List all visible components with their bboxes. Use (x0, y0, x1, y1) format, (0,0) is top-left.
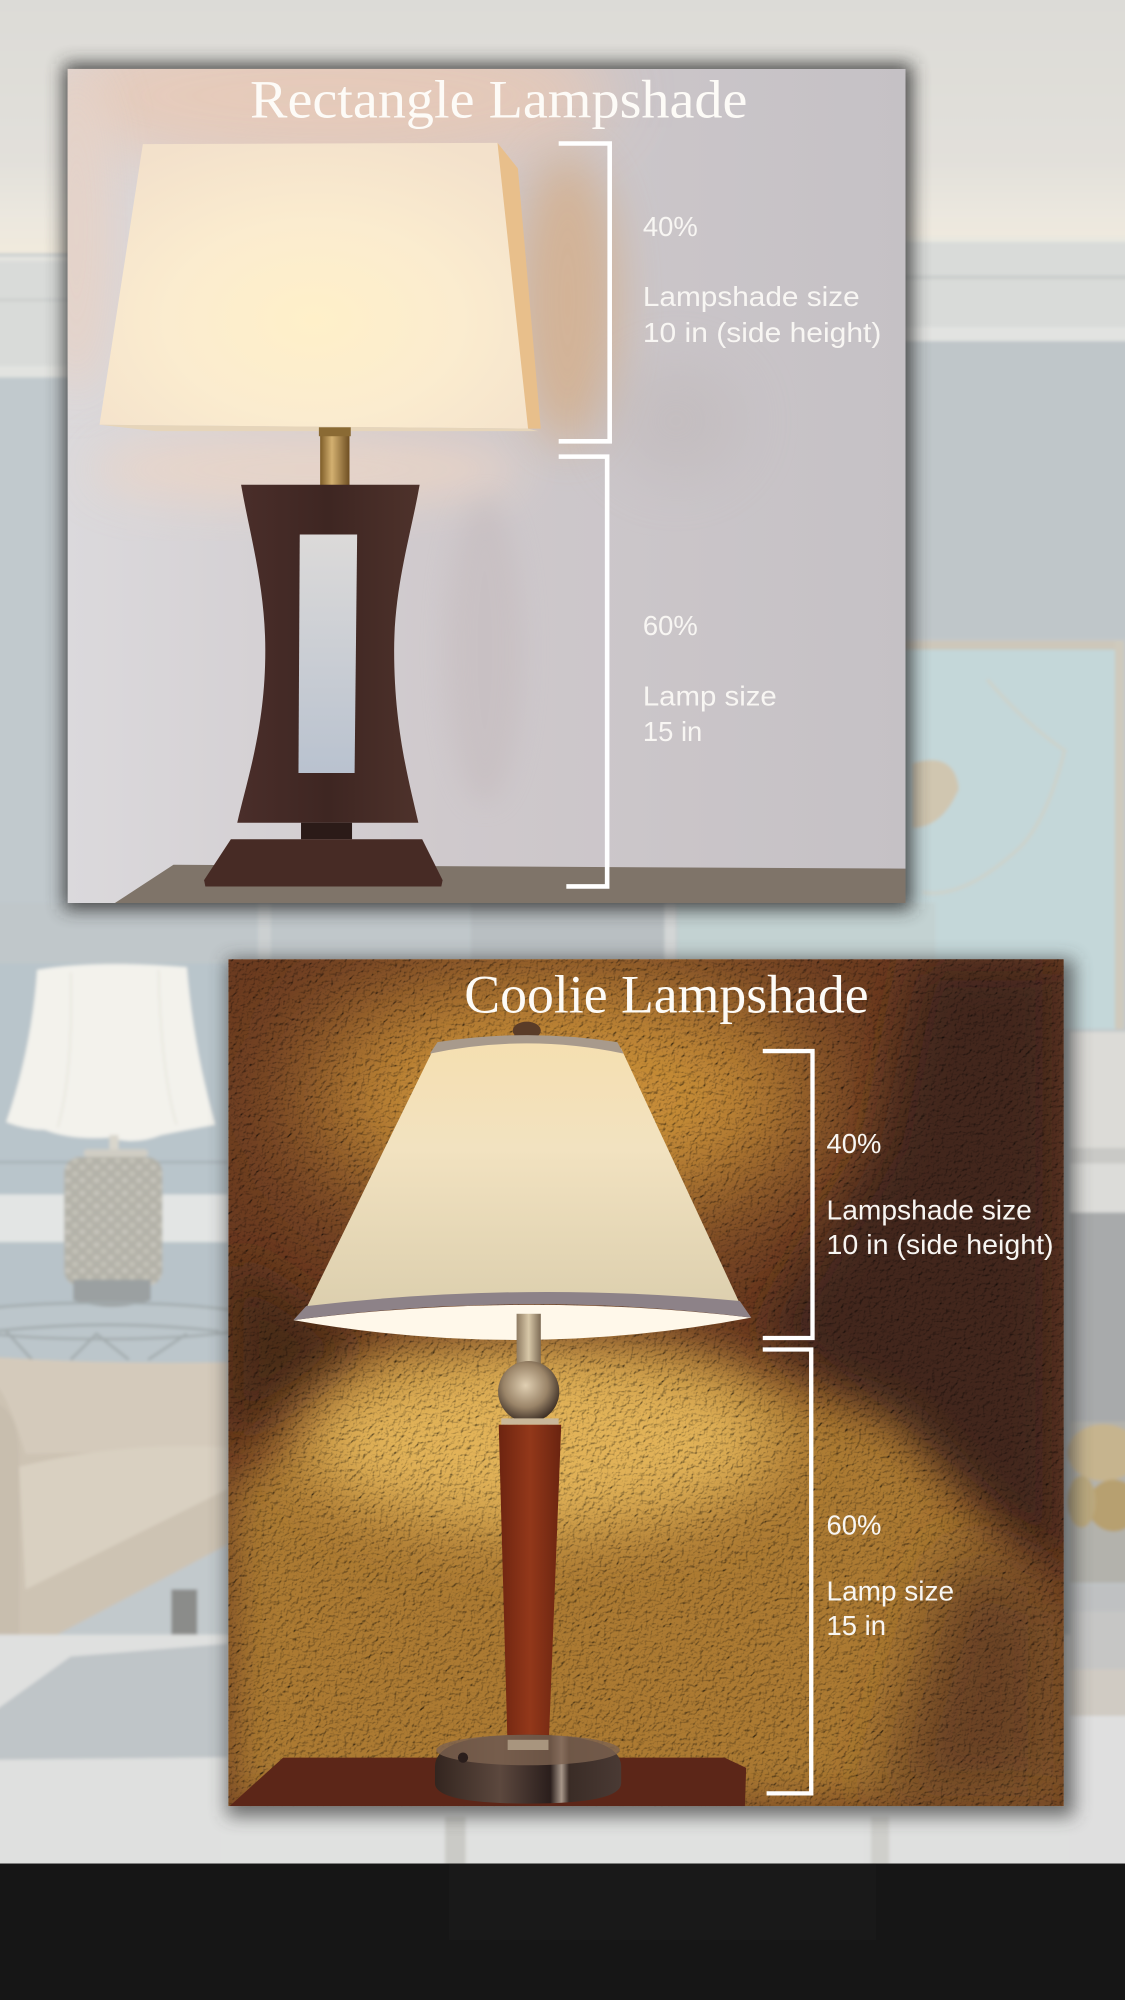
label: 40 percent lampshade size: Lampshade size (643, 281, 860, 312)
background armchair (0, 1357, 228, 1699)
panel shadow (64, 64, 912, 909)
background glass side table (0, 1303, 264, 1360)
label: 60 percent lamp size: Lamp size (827, 1576, 954, 1607)
metal lamp base (435, 1735, 621, 1804)
label: 40 percent lampshade size (827, 1128, 1054, 1260)
background table lamp (6, 964, 215, 1307)
label: 60 percent lamp size: 15 in (643, 716, 702, 747)
coolie lamp photo (228, 959, 1064, 1806)
cone of light on wall (228, 1349, 1064, 1806)
label: 40 percent lampshade size: 10 in (side height) (827, 1229, 1054, 1260)
rectangle lampshade form (99, 143, 541, 431)
panel: rectangle lampshade (38, 19, 912, 909)
title: Rectangle Lampshade: Rectangle Lampshade (250, 69, 747, 129)
lamp stem and ball (498, 1314, 559, 1425)
panel: coolie lampshade (227, 959, 1074, 1816)
background floor rug (0, 1635, 1125, 1876)
label: 40 percent lampshade size: 40% (827, 1128, 881, 1159)
label: 40 percent lampshade size: Lampshade size (827, 1194, 1032, 1225)
lamp neck (319, 427, 351, 486)
black footer band (0, 1864, 1125, 2000)
size brackets (763, 1051, 812, 1793)
label: 60 percent lamp size (827, 1509, 954, 1641)
label: 60 percent lamp size: 60% (643, 610, 698, 641)
label: 40 percent lampshade size: 10 in (side height) (643, 317, 881, 348)
table top (115, 865, 906, 903)
rectangle lamp photo (38, 19, 906, 903)
label: 60 percent lamp size: Lamp size (643, 680, 777, 711)
panel shadow (227, 959, 1074, 1816)
background fireplace (1067, 1032, 1125, 1873)
label: 40 percent lampshade size (643, 211, 881, 348)
label: 60 percent lamp size (643, 610, 777, 747)
title: Coolie Lampshade: Coolie Lampshade (464, 965, 869, 1025)
wooden lamp body (204, 485, 443, 886)
side table (230, 1758, 746, 1806)
background map picture (677, 638, 1125, 1032)
size brackets (559, 143, 610, 886)
label: 60 percent lamp size: 15 in (827, 1610, 886, 1641)
label: 40 percent lampshade size: 40% (643, 211, 698, 242)
red wood stem (499, 1425, 561, 1750)
coolie lampshade form (293, 1022, 751, 1340)
label: 60 percent lamp size: 60% (827, 1509, 881, 1540)
